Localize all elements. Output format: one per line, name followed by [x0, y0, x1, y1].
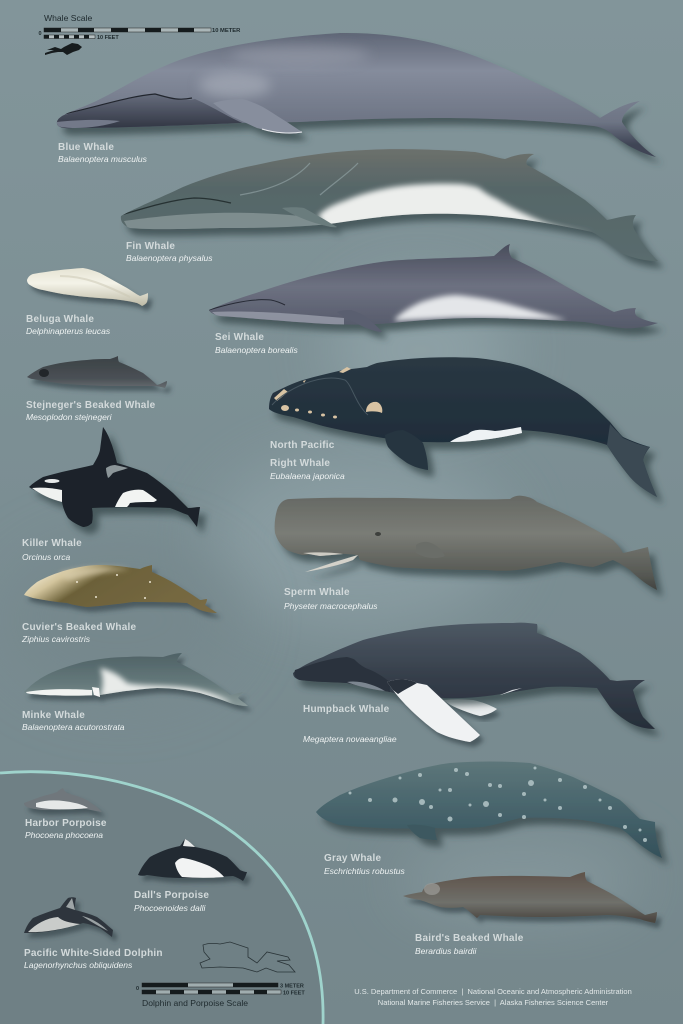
gray whale label: Eschrichtius robustus: [324, 866, 406, 876]
dolphin: pacific white-sided dolphin: [24, 897, 163, 970]
blue whale label: Blue Whale: [58, 142, 114, 153]
fin whale label: Fin Whale: [126, 241, 175, 252]
scale caption: Dolphin and Porpoise Scale: [142, 998, 248, 1008]
minke label: Minke Whale: [22, 710, 85, 721]
gray whale flipper: [407, 825, 437, 840]
blue whale label: [58, 142, 148, 164]
sperm whale flipper: [416, 542, 445, 558]
scale heading: Whale Scale: [44, 13, 92, 23]
humpback label: [303, 704, 397, 744]
icon: diver outline: [200, 942, 295, 972]
whale: fin whale: [121, 149, 658, 263]
right whale belly patch: [450, 427, 522, 442]
meter and feet scale bars: [38, 28, 241, 41]
whale: sei whale: [209, 244, 658, 355]
beluga body: [27, 268, 148, 306]
dolphin label: Pacific White-Sided Dolphin: [24, 948, 163, 959]
killer whale body: [29, 427, 200, 527]
sperm whale label: Sperm Whale: [284, 587, 350, 598]
blue whale label: Balaenoptera musculus: [58, 154, 148, 164]
scale bars: 3 METER: [280, 984, 304, 990]
stejneger's label: [26, 400, 156, 422]
gray whale label: [324, 853, 406, 876]
whale: humpback whale: [293, 623, 655, 744]
humpback label: Humpback Whale: [303, 704, 390, 715]
agency credits: U.S. Department of Commerce | National Oceanic and Atmospheric Administration: [354, 987, 632, 996]
beluga label: Beluga Whale: [26, 314, 94, 325]
dolphin body: [24, 897, 113, 937]
sei whale label: Balaenoptera borealis: [215, 345, 298, 355]
sperm whale label: [284, 587, 378, 611]
meter and feet scale bars: 10 FEET: [97, 35, 119, 41]
sei whale label: [215, 332, 298, 355]
fin whale label: Balaenoptera physalus: [126, 253, 213, 263]
sperm whale label: Physeter macrocephalus: [284, 601, 378, 611]
fin whale label: [126, 241, 213, 263]
whale scale: [38, 13, 241, 55]
cuvier's label: Cuvier's Beaked Whale: [22, 622, 136, 633]
porpoise: harbor porpoise: [24, 788, 107, 840]
agency credits: [354, 987, 632, 1007]
whale: minke whale: [22, 653, 248, 732]
cuvier's label: Ziphius cavirostris: [21, 634, 91, 644]
harbor porpoise label: Phocoena phocoena: [25, 830, 103, 840]
meter and feet scale bars: 0: [38, 31, 42, 37]
minke label: Balaenoptera acutorostrata: [22, 722, 125, 732]
whale: beluga: [26, 268, 148, 336]
humpback label: Megaptera novaeangliae: [303, 734, 397, 744]
agency credits: National Marine Fisheries Service | Alaska Fisheries Science Center: [378, 998, 609, 1007]
whale: gray whale: [316, 762, 662, 876]
stejneger's label: Stejneger's Beaked Whale: [26, 400, 156, 411]
blue whale body: [50, 33, 656, 157]
sperm whale lower jaw: [305, 555, 358, 572]
beluga label: Delphinapterus leucas: [26, 326, 111, 336]
whale: cuvier's beaked whale: [21, 565, 217, 644]
dolphin label: Lagenorhynchus obliquidens: [24, 960, 133, 970]
sei whale body: [209, 244, 658, 332]
killer whale label: [22, 538, 82, 562]
porpoise: dall's porpoise: [134, 839, 247, 913]
scale bars: [136, 983, 305, 996]
whale: blue whale: [50, 33, 656, 164]
dall's porpoise body: [138, 839, 247, 881]
dolphin and porpoise scale: [136, 942, 305, 1008]
right whale label: Right Whale: [270, 458, 330, 469]
fin whale flipper: [282, 207, 337, 227]
dall's porpoise label: Phocoenoides dalli: [134, 903, 206, 913]
killer whale label: Orcinus orca: [22, 552, 70, 562]
minke body: [24, 653, 248, 706]
baird's label: Berardius bairdii: [415, 946, 478, 956]
right whale body: [269, 357, 657, 497]
whale: north pacific right whale: [269, 357, 657, 497]
harbor porpoise body: [24, 788, 102, 812]
scale bars: 0: [136, 986, 139, 992]
dall's porpoise label: [134, 890, 209, 913]
humpback far flipper: [443, 699, 497, 716]
sei whale label: Sei Whale: [215, 332, 264, 343]
sei whale flipper: [337, 310, 382, 332]
sperm whale body: [275, 496, 657, 590]
dall's porpoise label: Dall's Porpoise: [134, 890, 209, 901]
right whale label: Eubalaena japonica: [270, 471, 345, 481]
scale bars: 10 FEET: [283, 990, 305, 996]
beluga label: [26, 314, 111, 336]
meter and feet scale bars: 10 METER: [212, 28, 241, 34]
callosities: [274, 367, 382, 418]
harbor porpoise label: [25, 818, 107, 840]
humpback white flipper: [387, 679, 480, 742]
right whale label: [270, 440, 345, 481]
right whale flipper: [385, 430, 428, 470]
harbor porpoise label: Harbor Porpoise: [25, 818, 107, 829]
blue whale flipper: [213, 99, 302, 134]
baird's body: [403, 872, 657, 923]
gray whale body: [316, 762, 662, 858]
humpback flipper base: [387, 679, 417, 694]
dolphin label: [24, 948, 163, 970]
gray whale barnacle patches: [348, 766, 647, 842]
baird's label: Baird's Beaked Whale: [415, 933, 524, 944]
humpback body: [293, 623, 655, 729]
stejneger's label: Mesoplodon stejnegeri: [26, 412, 113, 422]
cuvier's label: [21, 622, 136, 644]
killer whale label: Killer Whale: [22, 538, 82, 549]
arc: dolphin and porpoise inset boundary: [0, 772, 323, 1024]
whale: killer whale: [22, 427, 200, 562]
right whale label: North Pacific: [270, 440, 335, 451]
whale: baird's beaked whale: [403, 872, 657, 956]
whale: stejneger's beaked whale: [26, 356, 167, 422]
minke label: [22, 710, 125, 732]
baird's label: [415, 933, 524, 956]
gray whale label: Gray Whale: [324, 853, 381, 864]
icon: diver silhouette: [45, 43, 82, 55]
fin whale body: [121, 149, 658, 261]
cuvier's body: [24, 565, 217, 613]
whale: sperm whale: [275, 496, 657, 611]
stejneger's body: [27, 356, 167, 388]
